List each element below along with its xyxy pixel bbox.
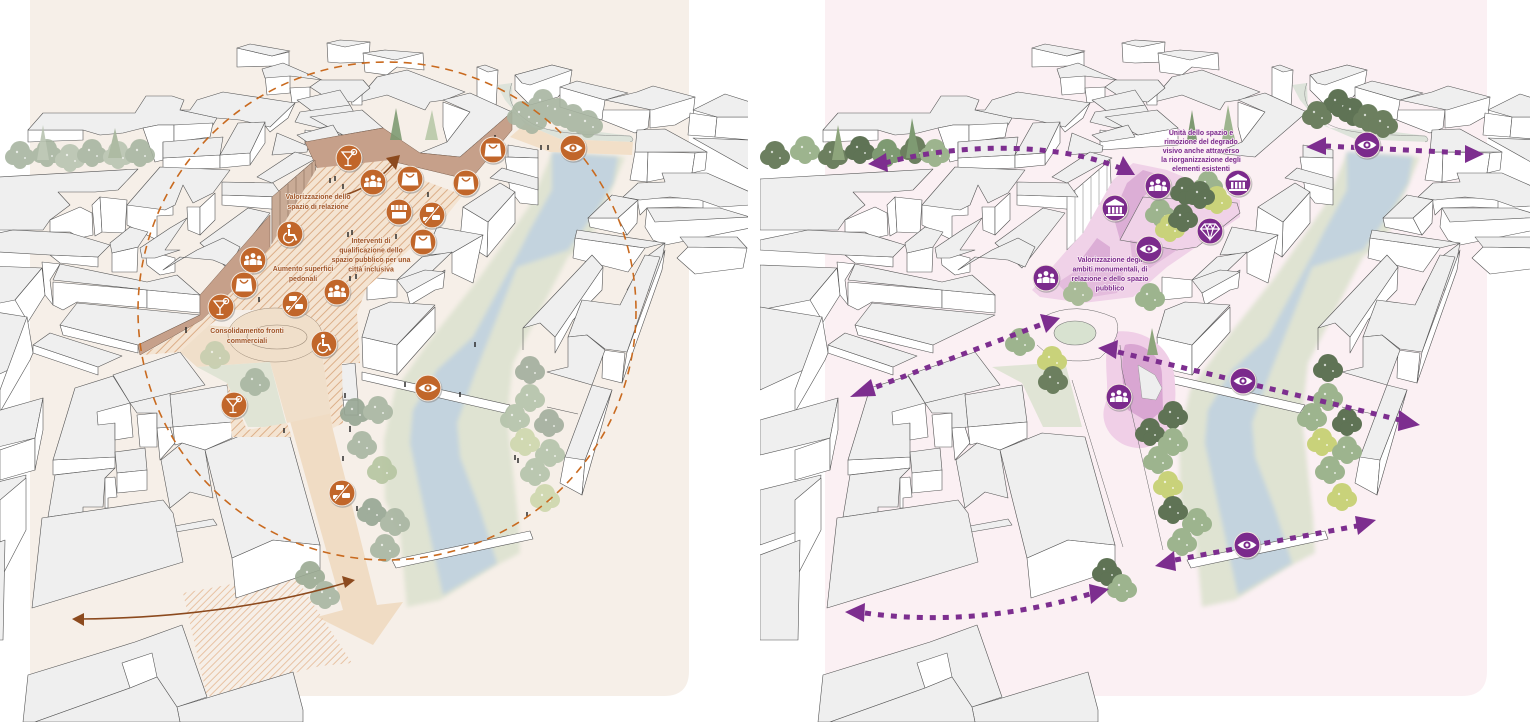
- lower hatched strip: [227, 383, 292, 437]
- trees on right plan: [760, 89, 1398, 602]
- hatched pedestrian plaza: [142, 160, 463, 428]
- darker pink areas: [1057, 170, 1177, 300]
- city base: river, bridges and buildings: [760, 40, 1530, 722]
- street edge lines: [1072, 345, 1163, 550]
- icon: museum: [1102, 195, 1129, 223]
- text: unità dello spazio: la riorganizzazione degli: [1161, 157, 1241, 164]
- icon: market: [386, 199, 413, 227]
- bottom hatched public space: [183, 573, 352, 697]
- city base: river, bridges and buildings: [0, 40, 750, 722]
- panel: left plan (commercial and pedestrian strategy): [0, 0, 750, 722]
- icon: eye view: [1234, 532, 1261, 560]
- icon: no cars: [282, 291, 309, 319]
- text: interventi: qualificazione dello: [339, 248, 403, 254]
- icon: people: [360, 169, 387, 197]
- icon: no cars: [419, 202, 446, 230]
- dashed double arrow top left: [868, 148, 1135, 175]
- icon: shopping bag: [410, 229, 437, 257]
- icon: museum: [1225, 170, 1252, 198]
- pedestrian street with arrowhead: [290, 414, 403, 645]
- icon: people: [1106, 384, 1133, 412]
- monument on axis: [1138, 328, 1162, 400]
- roundabout: [1037, 309, 1118, 361]
- pedestrians: [186, 135, 548, 517]
- text: valorizzazione: spazio di relazione: [287, 204, 349, 211]
- peach road at the river head: [510, 128, 633, 155]
- icon: people: [1145, 173, 1172, 201]
- central garden outline: [1120, 197, 1240, 250]
- text: valorizzazione degli ambiti: pubblico: [1096, 286, 1124, 292]
- icon: diamond: [1197, 218, 1224, 246]
- panel background left: [30, 0, 689, 696]
- text: valorizzazione degli ambiti: Valorizzazione degli: [1077, 257, 1143, 264]
- piazza roundabout: [228, 308, 322, 362]
- icon: shopping bag: [231, 272, 258, 300]
- connection arrow in plaza: [345, 155, 400, 195]
- text: valorizzazione degli ambiti: relazione e dello spazio: [1072, 276, 1148, 283]
- dashed arrow bottom: [845, 584, 1109, 622]
- text: unità dello spazio: rimozione del degrado: [1164, 139, 1238, 146]
- trees on left plan: [5, 89, 603, 609]
- panel: right plan (monumental and visual strategy): [760, 0, 1530, 722]
- text: consolidamento: Consolidamento fronti: [210, 328, 284, 335]
- double arrow across the street: [72, 576, 355, 626]
- icon: eye view: [1354, 132, 1381, 160]
- icon: people: [240, 247, 267, 275]
- icon: no cars: [329, 480, 356, 508]
- text: consolidamento: commerciali: [227, 338, 267, 345]
- icon: wheelchair: [277, 221, 304, 249]
- text: interventi: spazio pubblico per una: [332, 257, 411, 264]
- pink monumental area: [1032, 163, 1240, 303]
- dashed arrow from roundabout left: [850, 314, 1060, 397]
- dashed arrow across river: [1098, 340, 1420, 431]
- text: interventi: città inclusiva: [348, 266, 394, 274]
- brown building fronts along the plaza: [138, 112, 512, 355]
- icon: cocktail: [336, 145, 363, 173]
- dashed arrow along lower bridge: [1155, 516, 1376, 571]
- icon: eye view: [560, 135, 587, 163]
- icon: people: [324, 279, 351, 307]
- icon: cocktail: [221, 392, 248, 420]
- dashed double arrow top right: [1306, 137, 1484, 163]
- panel background right: [825, 0, 1487, 696]
- icon: eye view: [1136, 236, 1163, 264]
- piazza ground tint: [180, 325, 333, 423]
- icon: cocktail: [208, 294, 235, 322]
- text: unità dello spazio: visivo anche attraverso: [1163, 148, 1239, 155]
- text: valorizzazione: Valorizzazione dello: [285, 194, 351, 201]
- icon: eye view: [415, 375, 442, 403]
- text: valorizzazione degli ambiti: ambiti monumentali, di: [1072, 266, 1148, 274]
- icon: shopping bag: [480, 137, 507, 165]
- icon: people: [1033, 265, 1060, 293]
- pink area around monument: [1103, 331, 1175, 448]
- icon: wheelchair: [311, 331, 338, 359]
- text: unità dello spazio: elementi esistenti: [1172, 166, 1230, 173]
- text: aumento superfici: Aumento superfici: [273, 266, 333, 273]
- text: aumento superfici: pedonali: [289, 276, 317, 283]
- icon: shopping bag: [397, 166, 424, 194]
- icon: shopping bag: [453, 170, 480, 198]
- icon: eye view: [1230, 368, 1257, 396]
- text: interventi: Interventi di: [351, 238, 391, 245]
- study area dashed circle: [138, 62, 636, 560]
- text: unità dello spazio: Unità dello spazio e: [1169, 130, 1233, 137]
